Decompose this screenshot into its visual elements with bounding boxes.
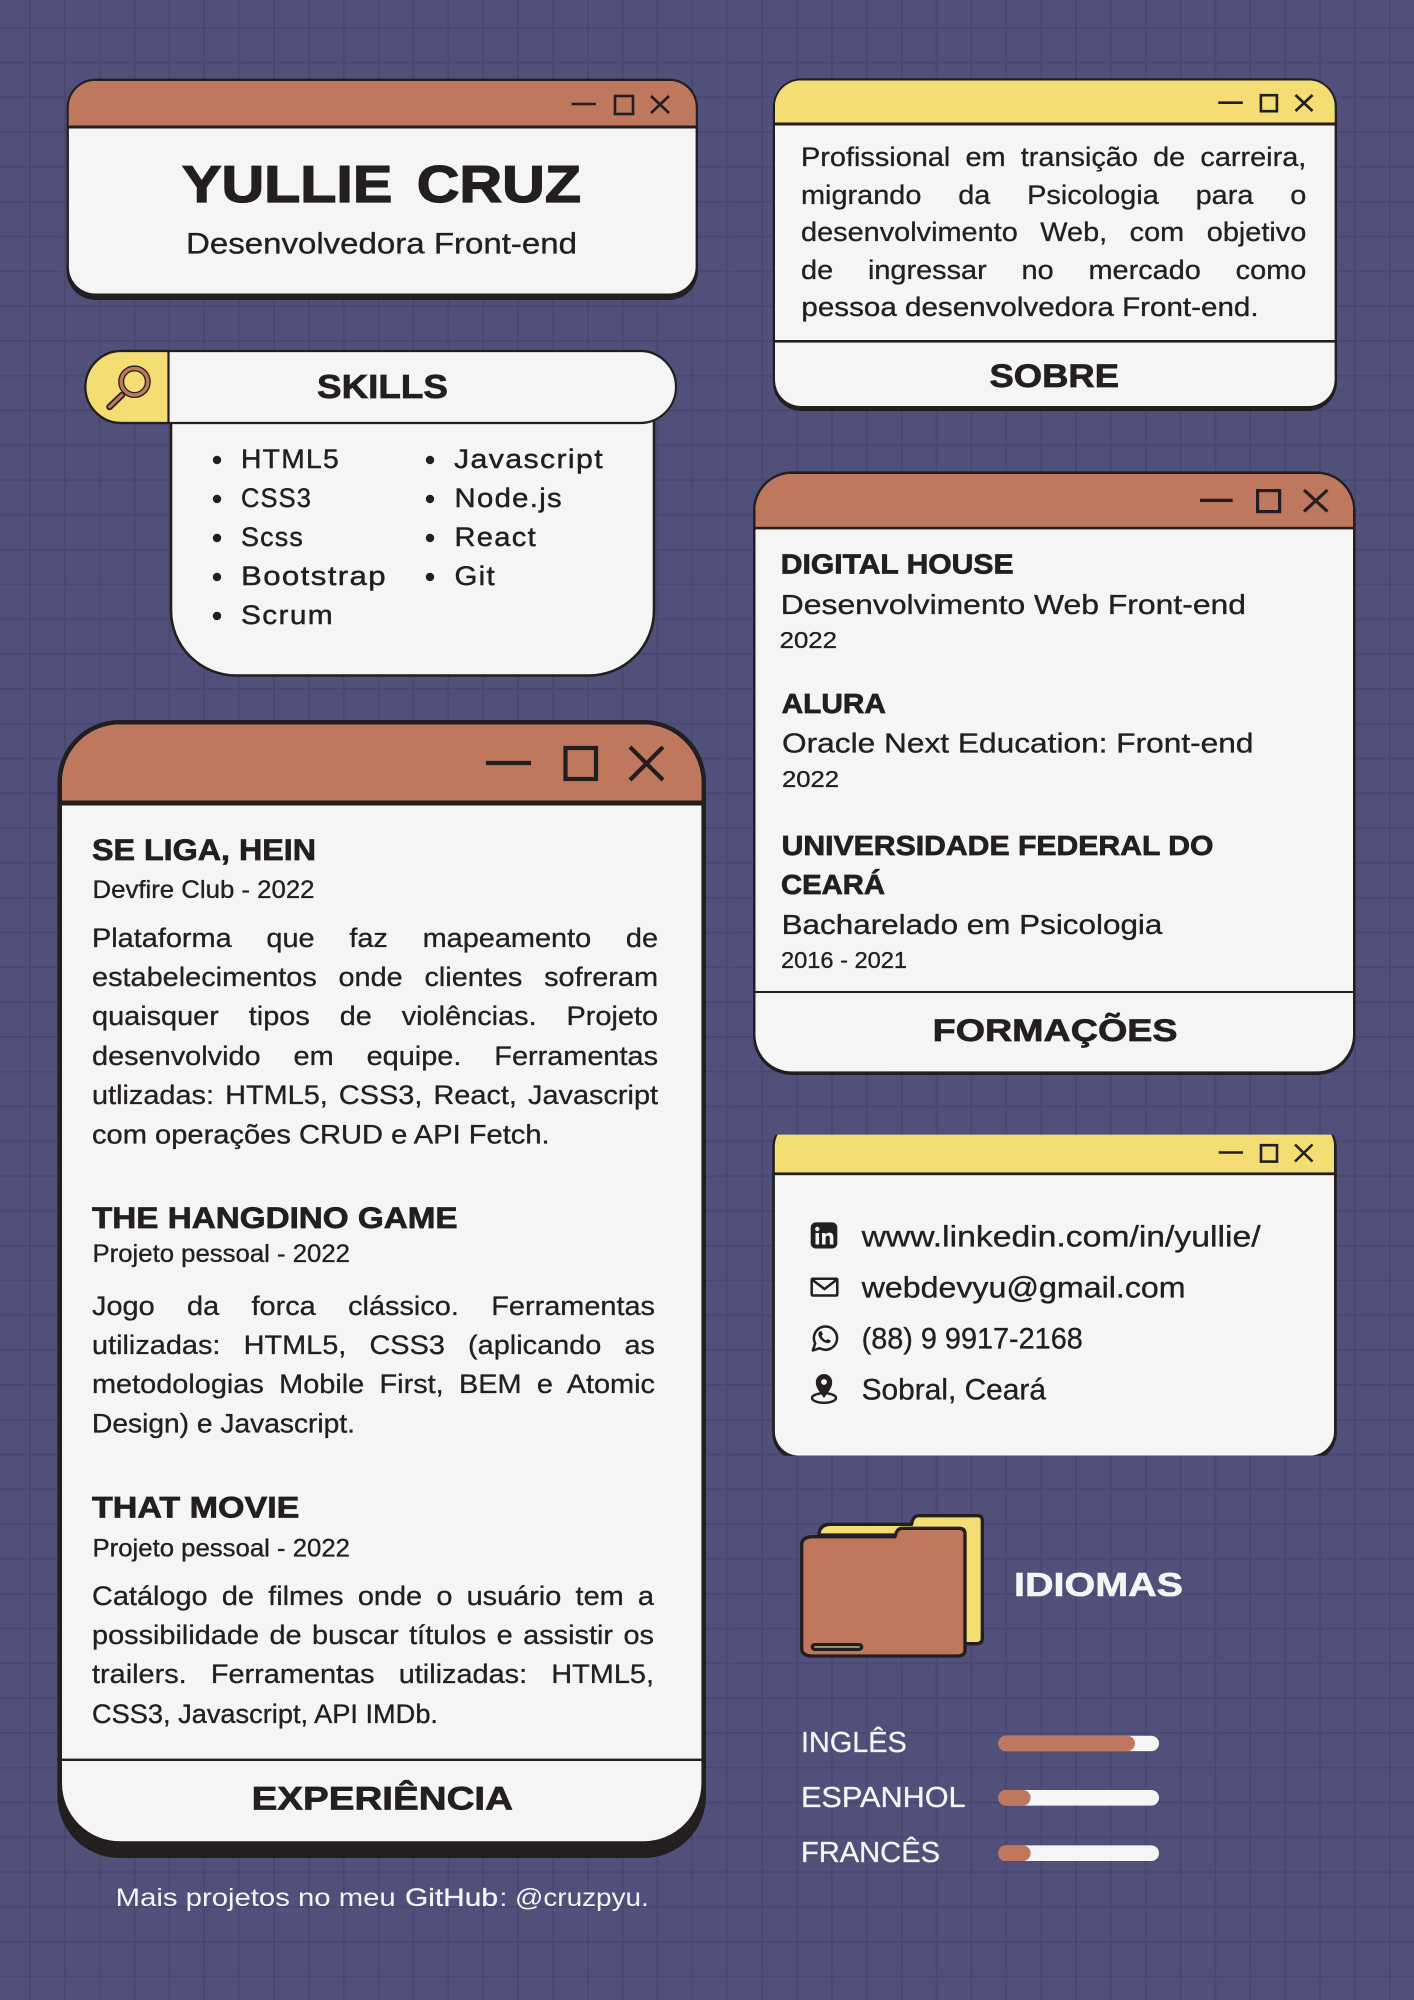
- project: That Movie: THAT MOVIE: [92, 1491, 299, 1524]
- course: Alura: 2022: [782, 766, 839, 792]
- panel: skills: [85, 351, 676, 676]
- icon: mail: [812, 1279, 837, 1296]
- project: Se Liga, Hein: [92, 834, 667, 1150]
- project: That Movie: Projeto pessoal - 2022: [92, 1534, 350, 1562]
- project: Se Liga, Hein: quaisquer tipos de violências. Projeto: [92, 1001, 658, 1031]
- project: The Hangdino Game: Projeto pessoal - 2022: [92, 1240, 350, 1268]
- skills list body: HTML5: [241, 444, 340, 474]
- project: That Movie: CSS3, Javascript, API IMDb.: [92, 1699, 438, 1729]
- course: Universidade Federal do Ceará: [781, 830, 1214, 973]
- window controls: [1218, 95, 1312, 111]
- language: inglês: [801, 1727, 1159, 1759]
- project: That Movie: trailers. Ferramentas utilizadas: HTML5,: [92, 1659, 654, 1689]
- skills list body: Scrum: [241, 600, 334, 630]
- project: Se Liga, Hein: desenvolvido em equipe. Ferramentas: [92, 1041, 658, 1071]
- window frame: [57, 720, 706, 1858]
- panel: education window: [753, 471, 1356, 1075]
- project: That Movie: Catálogo de filmes onde o usuário tem a: [92, 1581, 654, 1611]
- education heading: FORMAÇÕES: [933, 1012, 1178, 1048]
- skills list body: [171, 415, 654, 676]
- skills header pill: [85, 351, 676, 423]
- contact: phone: (88) 9 9917-2168: [862, 1322, 1083, 1356]
- window controls: [486, 747, 663, 780]
- language: espanhol: [801, 1782, 1159, 1814]
- about paragraph: desenvolvimento Web, com objetivo: [801, 217, 1307, 247]
- language: francês: FRANCÊS: [801, 1837, 940, 1869]
- project: The Hangdino Game: Design) e Javascript.: [92, 1408, 355, 1438]
- window controls: [1200, 490, 1328, 512]
- window frame: [67, 79, 698, 300]
- skills list body: Node.js: [454, 483, 563, 513]
- project: Se Liga, Hein: estabelecimentos onde clientes sofreram: [92, 962, 658, 992]
- project: Se Liga, Hein: Plataforma que faz mapeamento de: [92, 923, 658, 953]
- project: That Movie: [92, 1491, 667, 1729]
- course: Alura: Oracle Next Education: Front-end: [782, 728, 1254, 759]
- course: Digital House: [780, 548, 1246, 653]
- languages heading: IDIOMAS: [1014, 1566, 1183, 1603]
- about paragraph: [801, 139, 1321, 322]
- course: Universidade Federal do Ceará: UNIVERSIDADE FEDERAL DO: [782, 830, 1214, 861]
- course: Universidade Federal do Ceará: Bacharelado em Psicologia: [782, 909, 1163, 940]
- window frame: [773, 78, 1337, 411]
- icon: location pin: [812, 1374, 836, 1403]
- project: The Hangdino Game: Jogo da forca clássico. Ferramentas: [92, 1291, 655, 1321]
- about paragraph: de ingressar no mercado como: [801, 254, 1307, 284]
- window frame: [772, 1120, 1337, 1461]
- window controls: [1219, 1144, 1312, 1162]
- window frame: [753, 471, 1356, 1075]
- about paragraph: Profissional em transição de carreira,: [801, 142, 1307, 172]
- icon: folder: [802, 1516, 982, 1656]
- about paragraph: pessoa desenvolvedora Front-end.: [801, 292, 1259, 322]
- contact: location: Sobral, Ceará: [862, 1374, 1047, 1406]
- language: francês: [801, 1837, 1159, 1869]
- footer note: [116, 1884, 649, 1912]
- project: Se Liga, Hein: SE LIGA, HEIN: [92, 834, 316, 867]
- name heading: YULLIE CRUZ: [182, 156, 581, 214]
- skills list body: Bootstrap: [241, 561, 387, 591]
- course: Digital House: DIGITAL HOUSE: [781, 548, 1014, 580]
- footer note: Mais projetos no meu: [116, 1884, 396, 1912]
- course: Digital House: 2022: [780, 627, 837, 653]
- skills list body: Git: [454, 561, 496, 591]
- project: The Hangdino Game: [92, 1202, 667, 1438]
- project: That Movie: possibilidade de buscar títulos e assistir os: [92, 1620, 654, 1650]
- language: inglês: INGLÊS: [801, 1727, 907, 1759]
- about paragraph: migrando da Psicologia para o: [801, 180, 1307, 210]
- icon: linkedin: [811, 1222, 837, 1248]
- panel: name window: [67, 79, 698, 300]
- panel: about window: [773, 78, 1337, 411]
- panel: contact window: [772, 1120, 1337, 1461]
- course: Digital House: Desenvolvimento Web Front-end: [781, 589, 1246, 620]
- language: espanhol: ESPANHOL: [801, 1782, 966, 1814]
- course: Universidade Federal do Ceará: CEARÁ: [781, 869, 885, 900]
- project: The Hangdino Game: THE HANGDINO GAME: [92, 1202, 458, 1235]
- panel: experience window: [57, 720, 706, 1858]
- window controls: [572, 96, 669, 114]
- experience heading: EXPERIÊNCIA: [252, 1781, 513, 1817]
- skills list body: Scss: [241, 522, 304, 552]
- project: The Hangdino Game: metodologias Mobile First, BEM e Atomic: [92, 1369, 655, 1399]
- course: Universidade Federal do Ceará: 2016 - 2021: [781, 947, 907, 973]
- skills heading: SKILLS: [317, 369, 448, 406]
- job title: Desenvolvedora Front-end: [186, 228, 577, 260]
- course: Alura: [782, 688, 1254, 792]
- project: Se Liga, Hein: utlizadas: HTML5, CSS3, React, Javascript: [92, 1080, 658, 1110]
- skills list body: CSS3: [241, 483, 312, 513]
- skills list body: React: [454, 522, 537, 552]
- course: Alura: ALURA: [782, 688, 886, 719]
- icon: whatsapp: [813, 1327, 837, 1350]
- contact: email: webdevyu@gmail.com: [861, 1272, 1186, 1304]
- search icon tab: [85, 351, 168, 423]
- project: The Hangdino Game: utilizadas: HTML5, CSS3 (aplicando as: [92, 1330, 655, 1360]
- footer note: GitHub: [405, 1884, 498, 1912]
- contact: linkedin: www.linkedin.com/in/yullie/: [860, 1220, 1262, 1254]
- skills list body: Javascript: [454, 444, 604, 474]
- footer note: : @cruzpyu.: [500, 1884, 649, 1912]
- about heading: SOBRE: [990, 358, 1119, 394]
- project: Se Liga, Hein: com operações CRUD e API Fetch.: [92, 1120, 550, 1150]
- project: Se Liga, Hein: Devfire Club - 2022: [92, 876, 314, 904]
